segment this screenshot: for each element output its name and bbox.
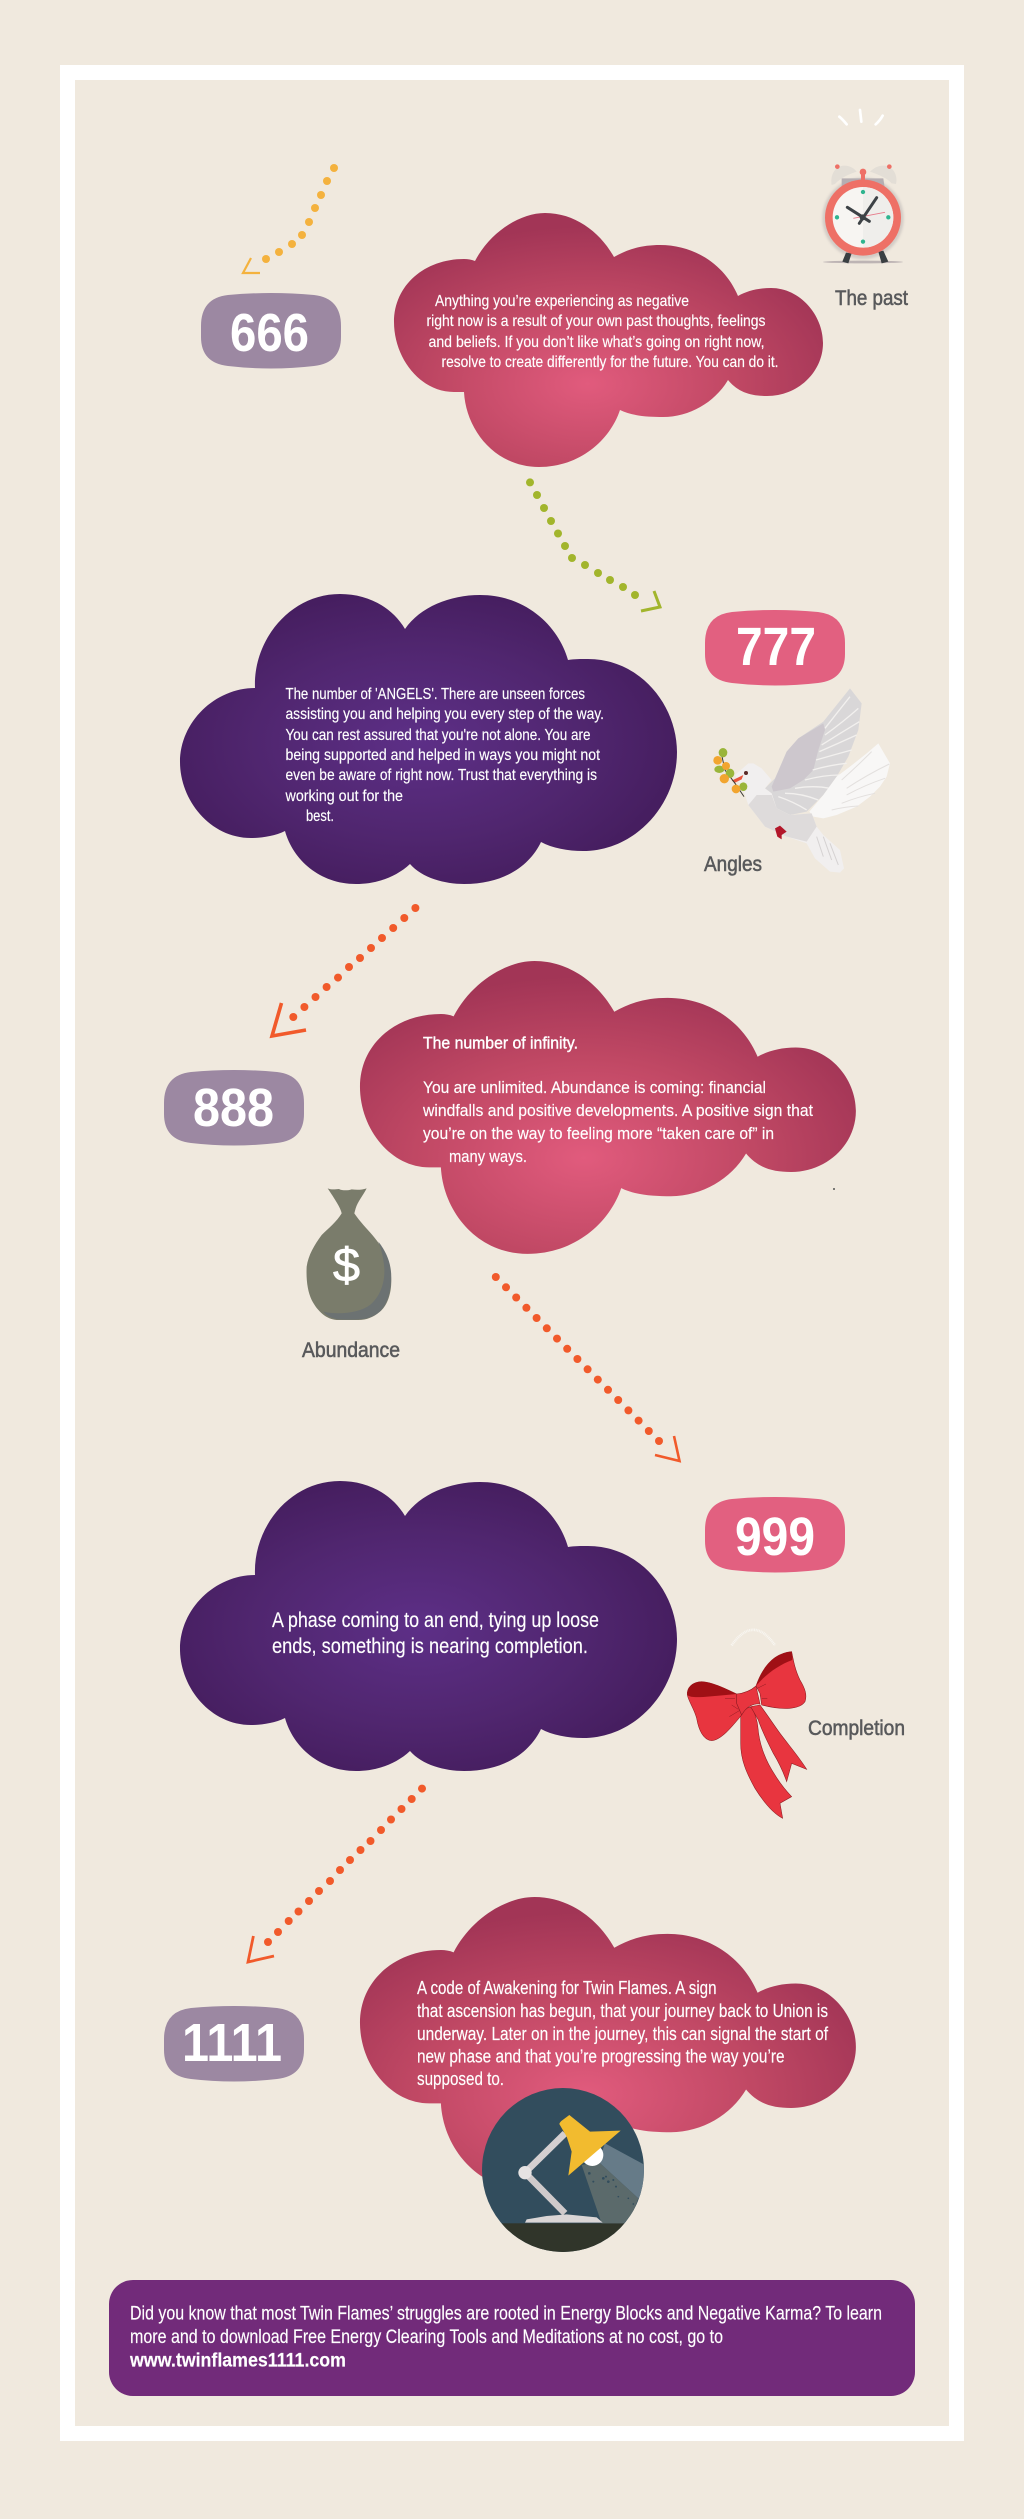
cloud: 888 message: windfalls and positive developments. A positive sign that xyxy=(422,1101,813,1120)
cloud: 666 message: resolve to create differently for the future. You can do it. xyxy=(442,354,778,371)
cloud: 888 message: many ways. xyxy=(449,1147,527,1166)
panel: footer call to action: more and to download Free Energy Clearing Tools and Meditations at no cost, go to xyxy=(130,2327,723,2348)
cloud: 777 message: best. xyxy=(306,808,334,825)
badge: 888 xyxy=(164,1070,304,1146)
arrow: orange dotted to 888 xyxy=(272,904,419,1036)
cloud: 1111 message: supposed to. xyxy=(417,2069,504,2089)
panel: footer call to action xyxy=(109,2280,915,2396)
icon: money bag xyxy=(307,1188,391,1320)
badge: 888: 888 xyxy=(193,1078,274,1138)
cloud: 999 message: A phase coming to an end, tying up loose xyxy=(272,1609,599,1632)
cloud: 1111 message: underway. Later on in the journey, this can signal the start of xyxy=(417,2024,829,2044)
arrow: orange dotted to 1111 xyxy=(248,1785,426,1962)
label: Angles: Angles xyxy=(704,853,762,876)
cloud: 777 message: assisting you and helping you every step of the way. xyxy=(286,706,604,723)
label: Abundance: Abundance xyxy=(302,1339,400,1362)
cloud: 777 message: The number of 'ANGELS'. There are unseen forces xyxy=(286,686,585,703)
cloud: 666 message: and beliefs. If you don’t like what’s going on right now, xyxy=(428,334,764,351)
arrow: green dotted to 777 xyxy=(526,478,660,611)
badge: 666: 666 xyxy=(230,303,309,363)
cloud: 666 message xyxy=(394,213,823,467)
icon: red bow xyxy=(687,1630,807,1818)
cloud: 666 message: right now is a result of your own past thoughts, feelings xyxy=(426,313,766,330)
badge: 777: 777 xyxy=(736,617,816,677)
cloud: 666 message: Anything you’re experiencing as negative xyxy=(435,293,689,310)
panel: footer call to action: www.twinflames1111.com xyxy=(129,2351,346,2372)
badge: 1111 xyxy=(164,2006,304,2082)
label: Completion: Completion xyxy=(808,1717,905,1740)
cloud: 777 message: You can rest assured that you're not alone. You are xyxy=(286,727,591,744)
badge: 1111: 1111 xyxy=(182,2013,282,2073)
cloud: 1111 message: new phase and that you’re progressing the way you’re xyxy=(417,2047,784,2067)
cloud: 999 message xyxy=(180,1481,677,1771)
cloud: 888 message: You are unlimited. Abundance is coming: financial xyxy=(423,1078,766,1097)
cloud: 999 message: ends, something is nearing completion. xyxy=(272,1635,588,1658)
arrow: yellow dotted to 666 xyxy=(243,164,338,273)
badge: 777 xyxy=(705,610,845,686)
cloud: 888 message: The number of infinity. xyxy=(423,1034,578,1052)
cloud: 777 message: even be aware of right now. Trust that everything is xyxy=(286,767,597,784)
cloud: 777 message: working out for the xyxy=(285,788,403,805)
cloud: 888 message: you’re on the way to feeling more “taken care of” in xyxy=(423,1124,774,1143)
icon: money bag: $ xyxy=(333,1238,360,1291)
cloud: 888 message xyxy=(360,961,856,1254)
stray speck xyxy=(833,1188,835,1190)
icon: alarm clock xyxy=(822,110,904,263)
icon: desk lamp circle xyxy=(480,2088,647,2257)
icon: dove xyxy=(713,688,890,873)
cloud: 1111 message xyxy=(360,1897,856,2190)
badge: 999: 999 xyxy=(735,1507,815,1567)
badge: 666 xyxy=(201,293,341,368)
cloud: 1111 message: that ascension has begun, that your journey back to Union is xyxy=(417,2001,828,2021)
panel: footer call to action: Did you know that most Twin Flames’ struggles are rooted in Energy Blocks and Negative Karma? To learn xyxy=(130,2303,882,2324)
cloud: 777 message: being supported and helped in ways you might not xyxy=(286,747,600,764)
arrow: orange dotted to 999 xyxy=(492,1273,680,1461)
cloud: 1111 message: A code of Awakening for Twin Flames. A sign xyxy=(417,1978,716,1998)
label: The past: The past xyxy=(835,287,908,310)
badge: 999 xyxy=(705,1497,845,1572)
cloud: 777 message xyxy=(180,594,677,884)
